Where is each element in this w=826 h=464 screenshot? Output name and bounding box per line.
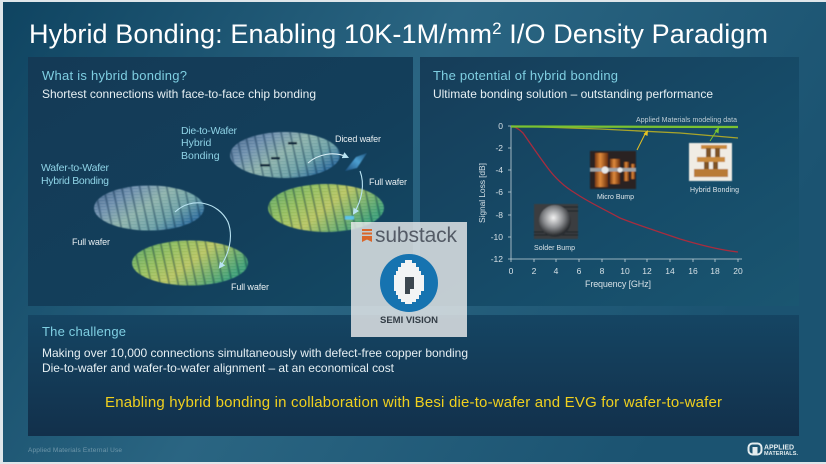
challenge line 1: Making over 10,000 connections simultaneously with defect-free copper bonding [42,346,468,360]
y axis ticks: -10 [491,232,503,242]
footer note: Applied Materials External Use [28,447,122,454]
watermark: substack and Semi Vision [351,222,467,337]
x axis ticks: 20 [733,266,743,276]
x axis ticks: 6 [577,266,582,276]
arrow: micro bump pointer [637,130,648,150]
die-to-wafer label: Hybrid [181,137,212,149]
title: I/O Density Paradigm [502,19,768,49]
die-to-wafer label: Die-to-Wafer [181,125,238,137]
x axis ticks: 14 [665,266,675,276]
x axis ticks: 2 [532,266,537,276]
x axis ticks [509,266,743,276]
panel: potential of hybrid bonding [420,57,799,306]
x axis ticks: 10 [620,266,630,276]
wafer: diced wafer source [230,132,340,178]
caption: full wafer right: Full wafer [369,177,407,187]
caption: full wafer bottom: Full wafer [231,282,269,292]
line chart: signal loss [477,117,743,289]
x axis ticks: 12 [642,266,652,276]
die-to-wafer label [181,125,238,162]
panel: the challenge [28,315,799,436]
title: Hybrid Bonding: Enabling 10K-1M/mm [29,19,492,49]
substack wordmark: substack [375,224,458,247]
wafer-to-wafer label line 2: Hybrid Bonding [41,175,109,187]
wafer-to-wafer label: Wafer-to-Wafer [41,162,110,174]
Semi Vision emblem [380,254,438,312]
y axis ticks: -8 [495,210,503,220]
wafer: top full wafer, wafer-to-wafer [94,186,204,230]
challenge line 2: Die-to-wafer and wafer-to-wafer alignment – at an economical cost [42,361,395,375]
collaboration callout: Enabling hybrid bonding in collaboration with Besi die-to-wafer and EVG for wafer-to-wafer [105,394,722,411]
x axis ticks: 0 [509,266,514,276]
caption: full wafer: Full wafer [72,237,110,247]
y axis label: Signal Loss [dB] [477,163,487,223]
wafer: full wafer target [268,184,384,232]
panel subheading: Ultimate bonding solution – outstanding performance [433,87,713,101]
panel heading: The challenge [42,324,126,339]
image: micro bump [590,151,636,189]
substack icon [362,229,372,242]
y axis ticks [491,121,503,264]
title: 2 [492,19,502,38]
y axis ticks: -6 [495,187,503,197]
arrow: die pick [308,154,347,163]
Semi Vision wordmark: SEMI VISION [380,315,438,326]
panel subheading: Shortest connections with face-to-face chip bonding [42,87,316,101]
wafer: bottom full wafer, wafer-to-wafer [132,240,248,286]
series: solder bump [511,126,738,252]
chart axes [508,126,742,262]
series: micro bump [511,126,738,138]
logo: Applied Materials: MATERIALS. [764,451,798,457]
die-to-wafer label: Bonding [181,150,220,162]
arrow: die place [354,171,362,213]
panel heading: The potential of hybrid bonding [433,68,618,83]
panel: what is hybrid bonding [28,57,413,306]
x axis ticks: 16 [688,266,698,276]
x axis ticks: 8 [600,266,605,276]
image: solder bump [534,204,578,239]
arrow: hybrid bonding pointer [710,127,719,141]
arrow: wafer to wafer [175,203,230,267]
image: hybrid bonding [689,143,732,181]
caption: micro bump: Micro Bump [597,194,634,201]
x axis ticks: 4 [554,266,559,276]
series: hybrid bonding [511,125,738,128]
x axis label: Frequency [GHz] [585,279,651,289]
y axis ticks: 0 [498,121,503,131]
caption: solder bump: Solder Bump [534,245,575,252]
y axis ticks: -12 [491,254,503,264]
diced die icon [345,153,367,171]
y axis ticks: -4 [495,165,503,175]
y axis ticks: -2 [495,143,503,153]
logo: Applied Materials: APPLIED [764,444,794,452]
source note: Applied Materials modeling data [636,117,737,124]
caption: hybrid bonding: Hybrid Bonding [690,187,739,194]
logo: Applied Materials [748,444,798,457]
x axis ticks: 18 [710,266,720,276]
caption: diced wafer: Diced wafer [335,134,381,144]
panel heading: What is hybrid bonding? [42,68,187,83]
